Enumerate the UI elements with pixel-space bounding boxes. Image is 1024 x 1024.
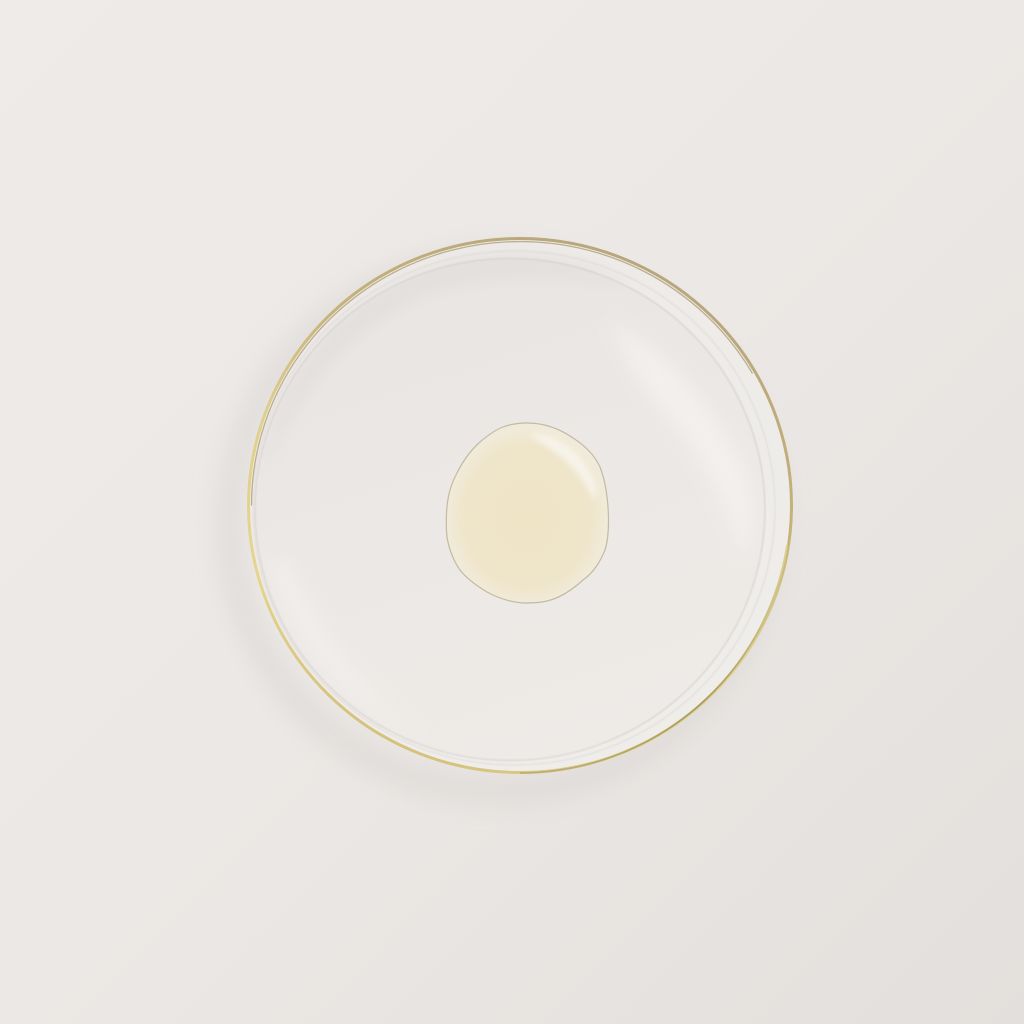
dish shadow [230,259,770,791]
gold rim [248,238,792,772]
inner top shadow [262,256,640,480]
outer rim band [248,239,792,773]
lower left glow [268,560,420,738]
droplet body [446,423,609,603]
petri dish [248,238,792,773]
gold rim second line [252,242,752,505]
dish interior [249,239,791,773]
inner wall ring [255,258,765,760]
outer wall ring [253,251,775,765]
rim lower right dark arc [520,545,787,773]
droplet highlight [530,434,596,500]
glass glare [610,322,752,560]
oil droplet [446,423,609,603]
